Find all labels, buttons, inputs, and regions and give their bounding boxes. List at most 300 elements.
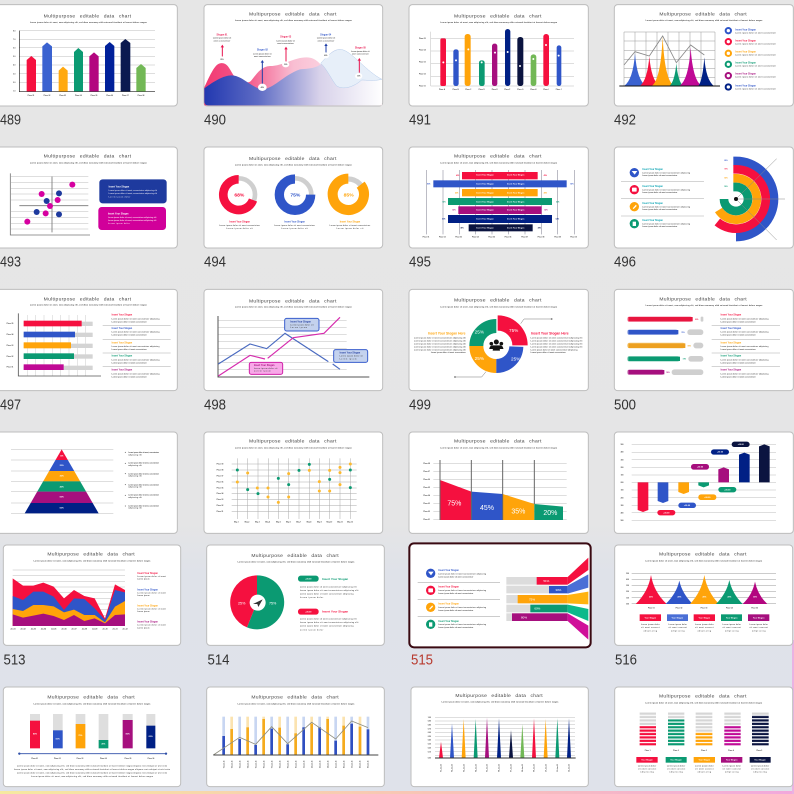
- bar labels: Insert Your Slogan: [476, 174, 495, 177]
- bar percentages: 80%: [521, 615, 527, 619]
- scatter dots: [24, 182, 75, 225]
- panel: 520 striped column chart: [615, 687, 793, 787]
- bullet list: Lorem ipsum dolor sit amet, consectetuer: [128, 472, 159, 475]
- trend line: [213, 721, 368, 755]
- donut captions: Lorem ipsum dolor sit amet consectetuer: [330, 224, 371, 227]
- title: Multipurpose editable data chart: [44, 14, 132, 20]
- bottom edge stripe: [0, 791, 794, 794]
- callout: pink: [249, 362, 283, 374]
- slide numbers: 489: [0, 112, 21, 128]
- spikes: [624, 37, 714, 86]
- axis labels: Place 04: [419, 49, 426, 52]
- gray stacks: [640, 712, 769, 746]
- list text: Lorem ipsum dolor sit amet consectetuer: [438, 592, 474, 595]
- subtitle: Lorem ipsum dolor sit amet, nam adipiscing elit, sed diam nonummy nibh euismod tincidunt ut laoreet dolore magna: [440, 446, 558, 449]
- donut captions: Lorem ipsum dolor sit amet consectetuer: [274, 224, 315, 227]
- magenta text box: [98, 207, 166, 230]
- captions: Lorem ipsum dolor: [695, 766, 714, 768]
- side text: Lorem ipsum dolor sit amet consectetuer: [721, 320, 756, 323]
- pie: 25%: [238, 601, 246, 605]
- pie: [230, 575, 284, 629]
- slogan buttons: Your Slogan: [641, 759, 654, 762]
- bar labels: Insert Your Slogan: [507, 200, 525, 203]
- donut orange 85%: [333, 179, 364, 210]
- slogan buttons: Your Slogan: [672, 616, 684, 619]
- panel: 513 stacked area chart: [3, 545, 181, 645]
- axis labels: Jan-10: [102, 629, 108, 631]
- column values: 50%: [56, 739, 60, 741]
- side text: Lorem ipsum dolor sit amet consectetuer adipiscing: [112, 331, 159, 334]
- panel: 489 arrow bar chart: [0, 5, 177, 106]
- column values: 25%: [101, 744, 106, 746]
- rotated date labels: 05-Jan-15: [487, 764, 489, 772]
- green points: [236, 463, 352, 495]
- bullet list: Lorem ipsum dolor sit amet, consectetuer: [128, 494, 159, 497]
- bottom axis labels: [423, 235, 577, 238]
- place labels: [31, 757, 154, 760]
- callouts: amet consectetuer: [254, 55, 271, 58]
- axis labels: Place F: [504, 89, 510, 91]
- title: Multipurpose editable data chart: [659, 552, 747, 558]
- y labels: 0.50: [428, 736, 431, 738]
- callouts: 25%: [220, 59, 224, 61]
- axis labels: Place 04: [75, 94, 82, 97]
- colored stacks: [640, 715, 769, 746]
- green block: Insert Your Slogan: [322, 577, 348, 581]
- donut captions: Insert Your Slogan: [229, 220, 250, 223]
- slide numbers: 515: [411, 652, 433, 668]
- title: Multipurpose editable data chart: [47, 552, 135, 558]
- bullet list: adipiscing elit: [128, 507, 142, 510]
- bar labels: Insert Your Slogan: [476, 183, 495, 186]
- place labels: Place 4: [728, 749, 734, 752]
- bar percentages: 60%: [534, 607, 541, 611]
- y labels: 300: [626, 585, 629, 587]
- axis labels: May-1: [234, 521, 239, 523]
- side percentages: 45%: [456, 174, 460, 177]
- bottom axis labels: Place 08: [538, 236, 544, 238]
- vertical markers: [440, 460, 534, 520]
- captions: Lorem ipsum dolor: [695, 624, 714, 626]
- axis labels: Place 05: [423, 487, 430, 489]
- slide numbers: 498: [204, 398, 226, 414]
- panel: 497 horizontal progress bars: [0, 289, 177, 391]
- panel: 491 rounded bar chart: [409, 5, 588, 106]
- axis labels: Place 04: [217, 492, 223, 495]
- axis labels: May-9: [317, 521, 322, 523]
- y labels: 100: [626, 597, 629, 599]
- donut blue 75%: 75%: [290, 193, 301, 199]
- bottom axis labels: Place 02: [439, 236, 446, 238]
- axis labels: May-12: [347, 521, 353, 523]
- list text: Lorem ipsum dolor sit amet consectetuer adipiscing: [438, 589, 486, 592]
- list text: Lorem ipsum dolor sit amet consectetuer: [438, 575, 474, 578]
- axis labels: May-7: [296, 521, 301, 523]
- axis labels: 3.0: [13, 73, 16, 75]
- bars: [24, 321, 93, 370]
- segment percentages: 75%: [509, 328, 518, 333]
- blue text box: Lorem ipsum dolor sit amet, consectetuer adipiscing elit: [109, 192, 157, 195]
- donut captions: Insert Your Slogan: [340, 220, 361, 223]
- subtitle: Lorem ipsum dolor sit amet, nam adipiscing elit, sed diam nonummy nibh euismod tincidunt ut laoreet dolore magna: [645, 701, 763, 704]
- blue layer: [13, 590, 125, 626]
- side text: Lorem ipsum dolor sit amet consectetuer: [112, 334, 147, 337]
- grid and axes: [431, 32, 574, 86]
- grid: [218, 321, 347, 369]
- bar percentages: 50%: [666, 372, 670, 374]
- callout: pink: Insert Your Slogan: [254, 364, 275, 367]
- place labels: Place 1: [645, 750, 651, 752]
- value pills: +00.00: [663, 512, 670, 514]
- area segments: [440, 480, 563, 520]
- bar labels: Place 04: [7, 333, 13, 336]
- axis labels: Jan-06: [61, 629, 67, 631]
- title: Multipurpose editable data chart: [44, 296, 132, 302]
- red block: [298, 609, 359, 631]
- magenta text box: Lorem ipsum dolor sit amet, consectetuer adipiscing elit: [108, 219, 157, 222]
- segment percentages: 25%: [475, 329, 484, 334]
- bullet list: Lorem ipsum dolor sit amet, consectetuer: [128, 483, 159, 486]
- layer percentages: 45%: [60, 485, 64, 488]
- percentages: 35%: [511, 508, 525, 515]
- panel: 496 radial semicircle chart: [614, 147, 793, 248]
- colored bars: [512, 577, 568, 621]
- guide lines: [11, 449, 113, 513]
- side text: Insert Your Slogan: [721, 355, 742, 358]
- bar labels: Insert Your Slogan: [507, 209, 525, 212]
- panel: 519 narrow spike chart: [411, 687, 588, 787]
- title: Multipurpose editable data chart: [249, 156, 337, 162]
- callouts: amet consectetuer: [318, 39, 335, 42]
- subtitle: Lorem ipsum dolor sit amet, nam adipiscing elit, sed diam nonummy nibh euismod tincidunt ut laoreet dolore magna: [440, 305, 558, 308]
- rotated date labels: [441, 764, 571, 772]
- callouts: Lorem ipsum dolor sit: [351, 50, 370, 53]
- title: Multipurpose editable data chart: [454, 298, 542, 304]
- axis labels: 4.0: [13, 64, 16, 67]
- red block: Lorem ipsum dolor sit amet consectetuer adipiscing elit: [300, 618, 357, 621]
- callouts: Slogan 01: [216, 35, 228, 37]
- rotated date labels: 10-Jan-15: [545, 764, 547, 772]
- legend: Insert Your Slogan: [735, 50, 756, 53]
- axis labels: Place C: [465, 89, 472, 91]
- side text: Lorem ipsum dolor sit amet consectetuer: [721, 375, 756, 378]
- donut red 68%: [222, 178, 255, 211]
- slogan buttons: Your Slogan: [670, 759, 683, 762]
- bar labels: Insert Your Slogan: [476, 191, 495, 194]
- side percentages: 45%: [455, 191, 459, 194]
- subtitle: Lorem ipsum dolor sit amet, nam adipiscing elit, sed diam nonummy nibh euismod tincidunt ut laoreet dolore magna: [34, 559, 151, 562]
- side percentages: 50%: [544, 210, 548, 212]
- axis labels: May-8: [307, 521, 311, 523]
- callouts: 60%: [324, 55, 328, 57]
- axis labels: May-6: [286, 521, 291, 523]
- segment percentages: [475, 328, 520, 361]
- left text block: Lorem ipsum dolor sit amet consectetuer adipiscing elit: [414, 343, 466, 346]
- side percentages: 62%: [556, 219, 560, 221]
- paragraph: Lorem ipsum dolor sit amet, nam adipiscing elit, sed diam nonummy nibh euismod tincidunt ut laoreet dolore magna aliquam erat volutpat ut wisi enim: [14, 768, 171, 771]
- legend: Lorem ipsum dolor sit amet consectetuer: [735, 53, 776, 56]
- side text: Insert Your Slogan: [112, 369, 133, 372]
- slogan buttons: Your Slogan: [726, 759, 738, 762]
- value pills: [657, 442, 750, 515]
- blue text box: Insert Your Slogan: [109, 186, 130, 189]
- bar labels: Place 05: [7, 323, 13, 325]
- y axis labels: 100: [621, 490, 623, 492]
- column values: [33, 733, 153, 746]
- legend: Lorem ipsum: [137, 627, 150, 629]
- panel: 499 donut with people icon: [409, 289, 588, 391]
- panel: stepped area chart: [409, 432, 588, 533]
- bar percentages: 90%: [695, 319, 699, 321]
- bar labels: Insert Your Slogan: [476, 209, 495, 212]
- slogan buttons: Your Slogan: [754, 759, 767, 762]
- gray columns: [30, 714, 155, 748]
- tents: [636, 575, 767, 604]
- callout: pink: Lorem ipsum dolor sit: [254, 367, 278, 370]
- rotated date labels: 01-Jan-15: [223, 760, 225, 768]
- grid: [433, 463, 567, 519]
- slogan buttons: [640, 614, 769, 621]
- segment percentages: 25%: [511, 356, 520, 361]
- y axis labels: 500: [621, 520, 623, 522]
- bar labels: Insert Your Slogan: [476, 226, 495, 229]
- side text: Insert Your Slogan: [721, 369, 742, 372]
- legend: Insert Your Slogan: [735, 73, 756, 76]
- slogan buttons: [636, 757, 771, 763]
- side text: Insert Your Slogan: [721, 314, 742, 317]
- axis: [435, 756, 576, 759]
- red block: Lorem ipsum dolor: [300, 629, 324, 631]
- concentric arcs: [717, 161, 774, 237]
- slide numbers: 514: [208, 652, 230, 668]
- rotated date labels: 16-Jan-15: [343, 760, 345, 768]
- axis labels: Place 02: [419, 74, 426, 76]
- column values: 80%: [33, 733, 37, 735]
- place labels: [648, 606, 758, 609]
- title: Multipurpose editable data chart: [659, 694, 747, 700]
- bar percentages: 72%: [683, 358, 687, 360]
- subtitle: Lorem ipsum dolor sit amet, nam adipiscing elit, sed diam nonummy nibh euismod tincidunt ut laoreet dolore magna: [238, 702, 355, 705]
- subtitle: Lorem ipsum dolor sit amet, nam adipiscing elit, sed diam nonummy nibh euismod tincidunt ut laoreet dolore magna: [442, 701, 559, 704]
- tent values: 20%: [727, 596, 732, 598]
- list text: [642, 168, 690, 228]
- pale orange bars: [230, 717, 361, 755]
- paragraph: Lorem ipsum dolor sit amet, nam adipiscing elit, sed diam nonummy nibh euismod tincidunt ut laoreet dolore magna aliquam erat volutpat ut wisi enim: [17, 765, 168, 768]
- y labels: 0.40: [428, 739, 431, 742]
- place labels: Place 03: [701, 607, 707, 609]
- bottom axis labels: Place 04: [472, 235, 479, 238]
- pale background bars: [222, 717, 369, 755]
- pyramid layers: [25, 449, 99, 513]
- donut captions: Lorem ipsum dolor sit: [281, 227, 308, 230]
- slide numbers: 491: [409, 112, 431, 128]
- legend: Insert Your Slogan: [137, 572, 158, 575]
- subtitle: Lorem ipsum dolor sit amet, nam adipiscing elit, sed diam nonummy nibh euismod tincidunt ut laoreet dolore magna: [30, 162, 148, 165]
- axis labels: Place 01: [423, 519, 430, 521]
- captions: adipiscing: [644, 630, 657, 632]
- bar labels: [476, 174, 525, 229]
- grid: [11, 176, 88, 229]
- grid: [13, 570, 125, 621]
- slogan buttons: Your Slogan: [699, 759, 711, 762]
- axis labels: Place 07: [217, 476, 223, 478]
- title: Multipurpose editable data chart: [44, 154, 132, 160]
- donut captions: [219, 220, 371, 230]
- slide numbers: 496: [614, 254, 636, 270]
- place labels: Place 01: [648, 607, 655, 609]
- subtitle: Lorem ipsum dolor sit amet, nam adipiscing elit, sed diam nonummy nibh euismod tincidunt ut laoreet dolore magna: [235, 19, 353, 22]
- callouts: Lorem ipsum dolor sit: [213, 37, 232, 40]
- axis labels: May-2: [245, 521, 249, 523]
- value pills: +00.00: [697, 467, 704, 469]
- side text: Insert Your Slogan: [112, 327, 133, 330]
- green block: [298, 576, 359, 599]
- bar percentages: [521, 579, 562, 619]
- side dividers: [712, 326, 780, 366]
- y axis labels: 200: [621, 497, 623, 499]
- rotated date labels: 13-Jan-15: [319, 760, 321, 768]
- value pills: +00.00: [724, 489, 731, 491]
- white data markers: [442, 44, 560, 67]
- subtitle: Lorem ipsum dolor sit amet, nam adipiscing elit, sed diam nonummy nibh euismod tincidunt ut laoreet dolore magna: [235, 306, 353, 309]
- bullet list: adipiscing elit: [128, 496, 142, 499]
- subtitle: Lorem ipsum dolor sit amet, nam adipiscing elit, sed diam nonummy nibh euismod tincidunt ut laoreet dolore magna: [646, 304, 763, 307]
- legend: Insert Your Slogan: [137, 621, 158, 624]
- axis labels: [423, 463, 430, 521]
- callouts: Slogan 02: [257, 50, 269, 52]
- list icons: [630, 168, 639, 228]
- list text: Lorem ipsum dolor sit amet consectetuer: [642, 208, 678, 211]
- bar labels: Insert Your Slogan: [507, 218, 525, 221]
- captions: adipiscing: [753, 772, 767, 774]
- axis labels: Jan-05: [51, 629, 56, 631]
- title: Multipurpose editable data chart: [454, 438, 542, 444]
- legend: Insert Your Slogan: [735, 85, 756, 88]
- subtitle: Lorem ipsum dolor sit amet, nam adipiscing elit, sed diam nonummy nibh euismod tincidunt ut laoreet dolore magna: [440, 162, 558, 165]
- captions: sit amet consect: [722, 768, 741, 771]
- value pills: +00.00: [704, 497, 711, 499]
- title: Multipurpose editable data chart: [454, 14, 542, 20]
- layer percentages: 25%: [60, 465, 64, 467]
- axis labels: [419, 38, 562, 91]
- captions: Lorem ipsum dolor: [638, 766, 657, 768]
- panel: 498 line chart with callouts: [204, 289, 383, 391]
- subtitle: Lorem ipsum dolor sit amet, nam adipiscing elit, sed diam nonummy nibh euismod tincidunt ut laoreet dolore magna: [645, 559, 763, 562]
- y labels: 400: [626, 578, 629, 581]
- blue bars: [222, 724, 369, 755]
- axis labels: Place D: [479, 89, 485, 91]
- slide numbers: 490: [204, 112, 226, 128]
- icon: paper plane: [253, 599, 263, 607]
- gray tracks: [672, 317, 703, 375]
- subtitle: Lorem ipsum dolor sit amet, nam adipiscing elit, sed diam nonummy nibh euismod tincidunt ut laoreet dolore magna: [34, 702, 151, 705]
- axis labels: [217, 464, 353, 523]
- green block: Lorem ipsum dolor sit amet consectetuer adipiscing elit: [300, 586, 357, 589]
- y axis labels: 500: [621, 444, 623, 446]
- legend: Lorem ipsum dolor sit amet: [137, 575, 166, 578]
- callout: top blue: Insert Your Slogan: [290, 320, 311, 323]
- side text: Insert Your Slogan: [721, 341, 742, 344]
- axis labels: 5.0: [13, 56, 16, 58]
- magenta text box: Lorem ipsum dolor: [108, 223, 130, 225]
- magenta line: [218, 317, 340, 376]
- bar labels: Insert Your Slogan: [507, 174, 525, 177]
- blue text box: [99, 179, 167, 203]
- list text: [438, 569, 486, 629]
- grid: [232, 458, 357, 519]
- tent values: 25%: [649, 596, 653, 598]
- layer percentages: [60, 456, 64, 510]
- layer percentages: 65%: [60, 508, 64, 510]
- axis labels: 7.0: [13, 39, 16, 41]
- green block: Lorem ipsum dolor sit amet consectetuer adipiscing: [300, 592, 353, 595]
- value pills: +00.00: [717, 452, 724, 454]
- y axis labels: 400: [621, 451, 623, 454]
- layer percentages: 55%: [60, 496, 64, 498]
- captions: sit amet consect: [722, 626, 741, 629]
- captions: sit amet consect: [667, 768, 686, 771]
- list text: Lorem ipsum dolor sit amet consectetuer adipiscing: [642, 205, 690, 208]
- bar percentages: 70%: [681, 332, 685, 334]
- axis labels: Place 02: [44, 95, 50, 97]
- percentages: 75%: [447, 501, 461, 508]
- side percentages: 50%: [452, 210, 456, 212]
- y labels: 200: [626, 591, 629, 593]
- magenta layer: [13, 614, 125, 626]
- callouts: Slogan 05: [355, 48, 367, 50]
- place labels: Place 05: [751, 607, 758, 609]
- axes: [218, 316, 369, 377]
- left text block: Lorem ipsum dolor sit amet consectetuer adipiscing elit: [414, 337, 466, 340]
- bars: [638, 444, 770, 512]
- bottom axis labels: Place 10: [570, 236, 577, 238]
- place labels: Place 2: [673, 750, 679, 752]
- place labels: Place 02: [54, 758, 61, 760]
- axis labels: May-5: [276, 521, 281, 523]
- title: Multipurpose editable data chart: [249, 438, 337, 444]
- bar percentages: 30%: [555, 588, 562, 592]
- red layer: [13, 578, 125, 626]
- rotated date labels: 09-Jan-15: [287, 760, 289, 768]
- captions: adipiscing: [725, 630, 738, 632]
- list text: Lorem ipsum dolor sit amet consectetuer adipiscing: [438, 606, 486, 609]
- right text block: Lorem ipsum dolor sit amet consectetuer adipiscing: [531, 348, 577, 351]
- place labels: Place 05: [125, 758, 131, 760]
- panel: pyramid chart: [0, 432, 177, 533]
- axis labels: Place 08: [423, 463, 430, 465]
- legend: Insert Your Slogan: [735, 28, 756, 31]
- bottom axis labels: Place 01: [423, 236, 429, 238]
- rotated date labels: 02-Jan-15: [231, 760, 233, 768]
- arrow axis: [18, 752, 167, 755]
- callouts: [213, 33, 370, 91]
- axis labels: Place 06: [423, 479, 430, 481]
- rotated date labels: 07-Jan-15: [271, 760, 273, 768]
- side text: Lorem ipsum dolor sit amet consectetuer adipiscing: [721, 372, 768, 375]
- tent values: 25%: [702, 596, 707, 598]
- magenta text box: Lorem ipsum dolor sit amet, consectetuer adipiscing elit: [108, 216, 157, 219]
- bar labels: Place 01: [7, 367, 13, 369]
- tent values: 15%: [753, 596, 757, 598]
- rotated date labels: [223, 760, 370, 768]
- side percentages: 62%: [442, 201, 446, 203]
- y labels: 0.90: [428, 721, 431, 723]
- title: Multipurpose editable data chart: [47, 694, 135, 700]
- side text: [112, 314, 159, 378]
- bar percentages: 80%: [688, 345, 692, 347]
- legend: Lorem ipsum: [137, 595, 150, 597]
- horizontal bars: [433, 172, 567, 231]
